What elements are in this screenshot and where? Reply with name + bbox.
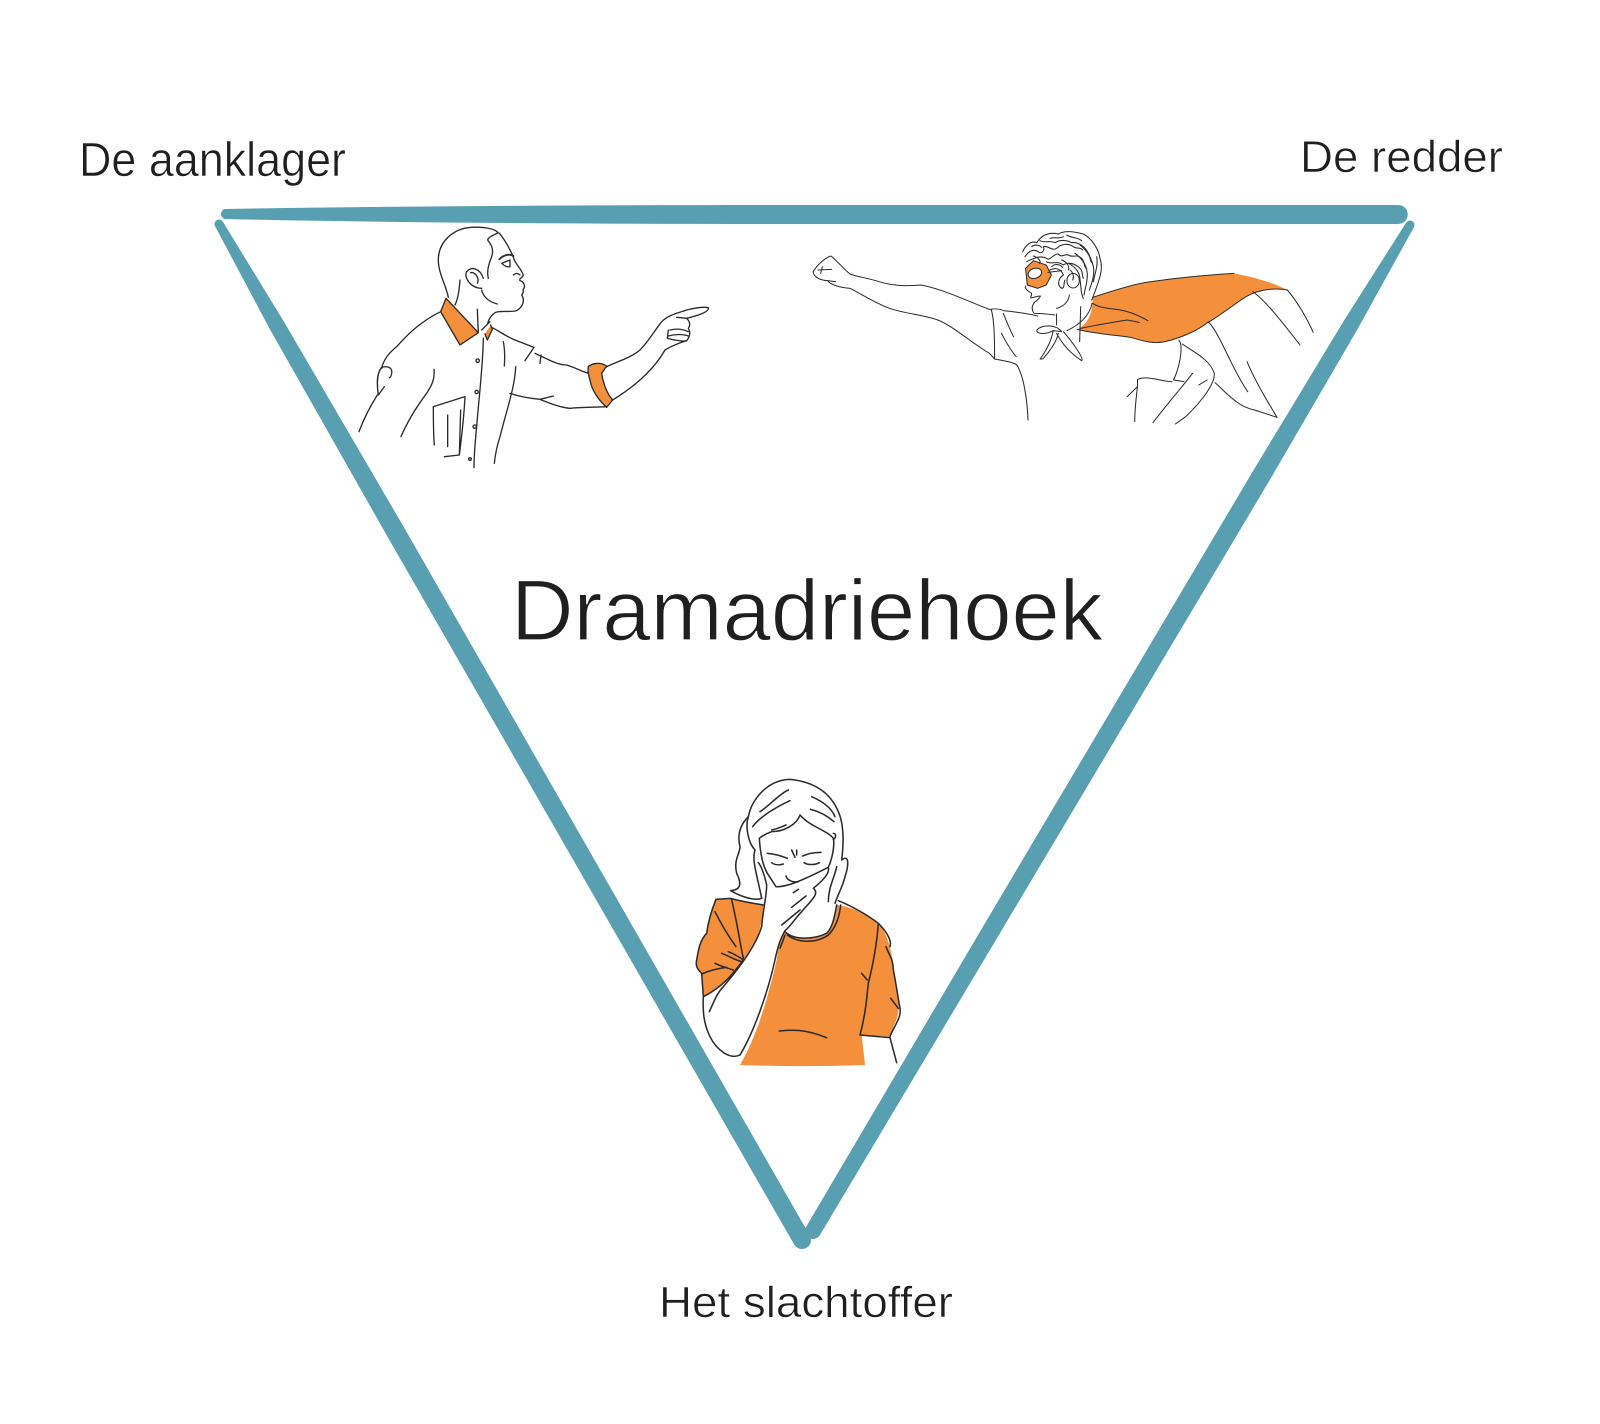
label: Het slachtoffer: Het slachtoffer: [659, 1278, 953, 1327]
figure: accuser pointing: [359, 227, 708, 468]
title: Dramadriehoek: [511, 563, 1104, 659]
label: De aanklager: De aanklager: [79, 134, 346, 187]
figure: victim covering mouth: [696, 779, 900, 1066]
label: De redder: De redder: [1300, 133, 1503, 182]
figure: rescuer with cape: [813, 232, 1313, 424]
triangle frame: [214, 205, 1414, 1249]
